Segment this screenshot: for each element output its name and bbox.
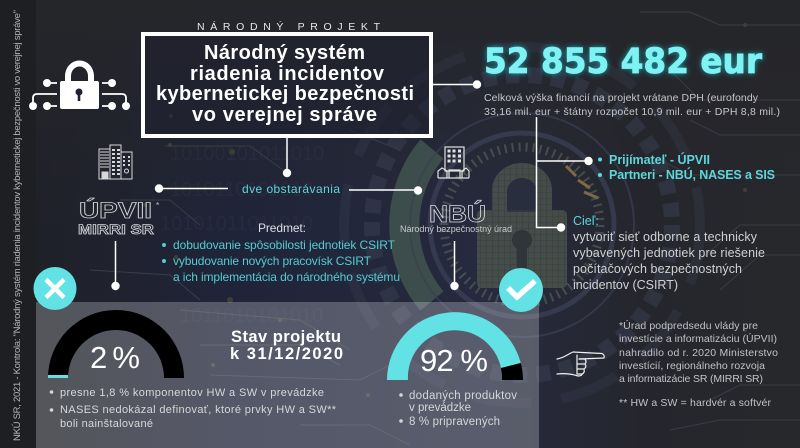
logo: NBÚ: NBÚ bbox=[429, 200, 486, 228]
panel: project status bbox=[36, 302, 539, 448]
background: 1011010101010 bbox=[180, 305, 323, 327]
heading: project status bbox=[230, 328, 343, 363]
gauge: 2 percent bbox=[48, 310, 184, 378]
footnotes: nahradilo od r. 2020 Ministerstvo bbox=[619, 347, 778, 359]
logo: ÚPVII MIRRI SR bbox=[78, 198, 160, 237]
gauge: 92 percent: 92 % bbox=[420, 343, 488, 378]
procurement subject: a ich implementácia do národného systému bbox=[173, 270, 400, 284]
status notes: NBÚ: v prevádzke bbox=[409, 402, 471, 414]
footnotes bbox=[619, 319, 778, 409]
title box: Národný systém bbox=[204, 42, 365, 64]
title box bbox=[143, 34, 431, 136]
funding description: Celková výška financií na projekt vrátane DPH (eurofondy bbox=[484, 92, 759, 104]
status notes: ÚPVII: NASES nedokázal definovať, ktoré prvky HW a SW** bbox=[60, 404, 337, 416]
logo: NBÚ: Národný bezpečnostný úrad bbox=[400, 224, 512, 234]
connector: funding branches bbox=[536, 117, 593, 232]
funding description: 33,16 mil. eur + štátny rozpočet 10,9 mil. eur + DPH 8,8 mil.) bbox=[484, 106, 780, 118]
recipient and partners: Prijímateľ - ÚPVII bbox=[609, 152, 710, 167]
amount: 52 855 482 eur bbox=[484, 42, 763, 82]
icon: cross badge bbox=[34, 267, 76, 310]
label: two procurements: dve obstarávania bbox=[242, 182, 340, 196]
footnotes: ** HW a SW = hardvér a softvér bbox=[619, 397, 772, 409]
goal: incidentov (CSIRT) bbox=[573, 278, 678, 292]
gauge: 92 percent bbox=[387, 312, 523, 380]
label: national project: NÁRODNÝ PROJEKT bbox=[197, 20, 381, 33]
footnotes: *Úrad podpredsedu vlády pre bbox=[619, 319, 758, 332]
procurement subject bbox=[162, 221, 400, 284]
logo: NBÚ bbox=[400, 200, 512, 234]
status notes: NBÚ bbox=[399, 390, 517, 428]
heading: project status: Stav projektu bbox=[231, 328, 341, 346]
connectors: logos to gauges bbox=[111, 241, 459, 290]
goal: Cieľ: bbox=[573, 214, 599, 228]
side credit: NKÚ SR, 2021 - Kontrola: "Národný systém riadenia incidentov kybernetickej bezpečnosti vo verejnej správe" bbox=[12, 10, 23, 441]
status notes: NBÚ: dodaných produktov bbox=[409, 390, 517, 402]
gauge: 2 percent: 2 % bbox=[90, 340, 140, 375]
status notes: ÚPVII: boli nainštalované bbox=[60, 418, 153, 430]
connector: two procurements bbox=[155, 138, 422, 195]
recipient and partners bbox=[598, 152, 775, 182]
heading: project status: k 31/12/2020 bbox=[230, 345, 343, 363]
status notes: NBÚ: 8 % pripravených bbox=[409, 416, 500, 428]
icon: office building bbox=[438, 147, 469, 178]
footnotes: investície a informatizáciu (ÚPVII) bbox=[619, 332, 777, 345]
background: 10101011011010 bbox=[160, 213, 313, 235]
background: 10100101011010 bbox=[170, 143, 324, 165]
icon: padlock with circuits bbox=[29, 60, 130, 110]
logo: ÚPVII MIRRI SR: MIRRI SR bbox=[78, 221, 154, 237]
title box: riadenia incidentov bbox=[190, 63, 385, 85]
procurement subject: Predmet: bbox=[258, 221, 306, 235]
status notes: ÚPVII bbox=[50, 387, 337, 430]
icon: city buildings bbox=[99, 145, 132, 179]
connector: title to amount bbox=[433, 80, 481, 89]
icon: pointing hand bbox=[557, 352, 604, 376]
title box: vo verejnej správe bbox=[192, 104, 377, 126]
procurement subject: dobudovanie spôsobilosti jednotiek CSIRT bbox=[173, 238, 396, 252]
title box: kybernetickej bezpečnosti bbox=[156, 83, 414, 105]
funding description bbox=[484, 92, 780, 118]
procurement subject: vybudovanie nových pracovísk CSIRT bbox=[173, 254, 372, 268]
footnotes: a informatizácie SR (MIRRI SR) bbox=[619, 373, 763, 385]
goal: vytvoriť sieť odborne a technicky bbox=[573, 230, 758, 244]
footnotes: investícií, regionálneho rozvoja bbox=[619, 360, 765, 372]
logo: ÚPVII MIRRI SR: ÚPVII bbox=[79, 198, 152, 223]
background: 1010110101010 bbox=[170, 179, 313, 201]
status notes: ÚPVII: presne 1,8 % komponentov HW a SW v prevádzke bbox=[60, 387, 324, 399]
recipient and partners: Partneri - NBÚ, NASES a SIS bbox=[609, 167, 775, 182]
goal: vybavených jednotiek pre riešenie bbox=[573, 246, 765, 260]
icon: check badge bbox=[499, 268, 543, 312]
goal bbox=[573, 214, 765, 292]
logo: ÚPVII MIRRI SR: * bbox=[156, 201, 160, 210]
goal: počítačových bezpečnostných bbox=[573, 262, 742, 276]
